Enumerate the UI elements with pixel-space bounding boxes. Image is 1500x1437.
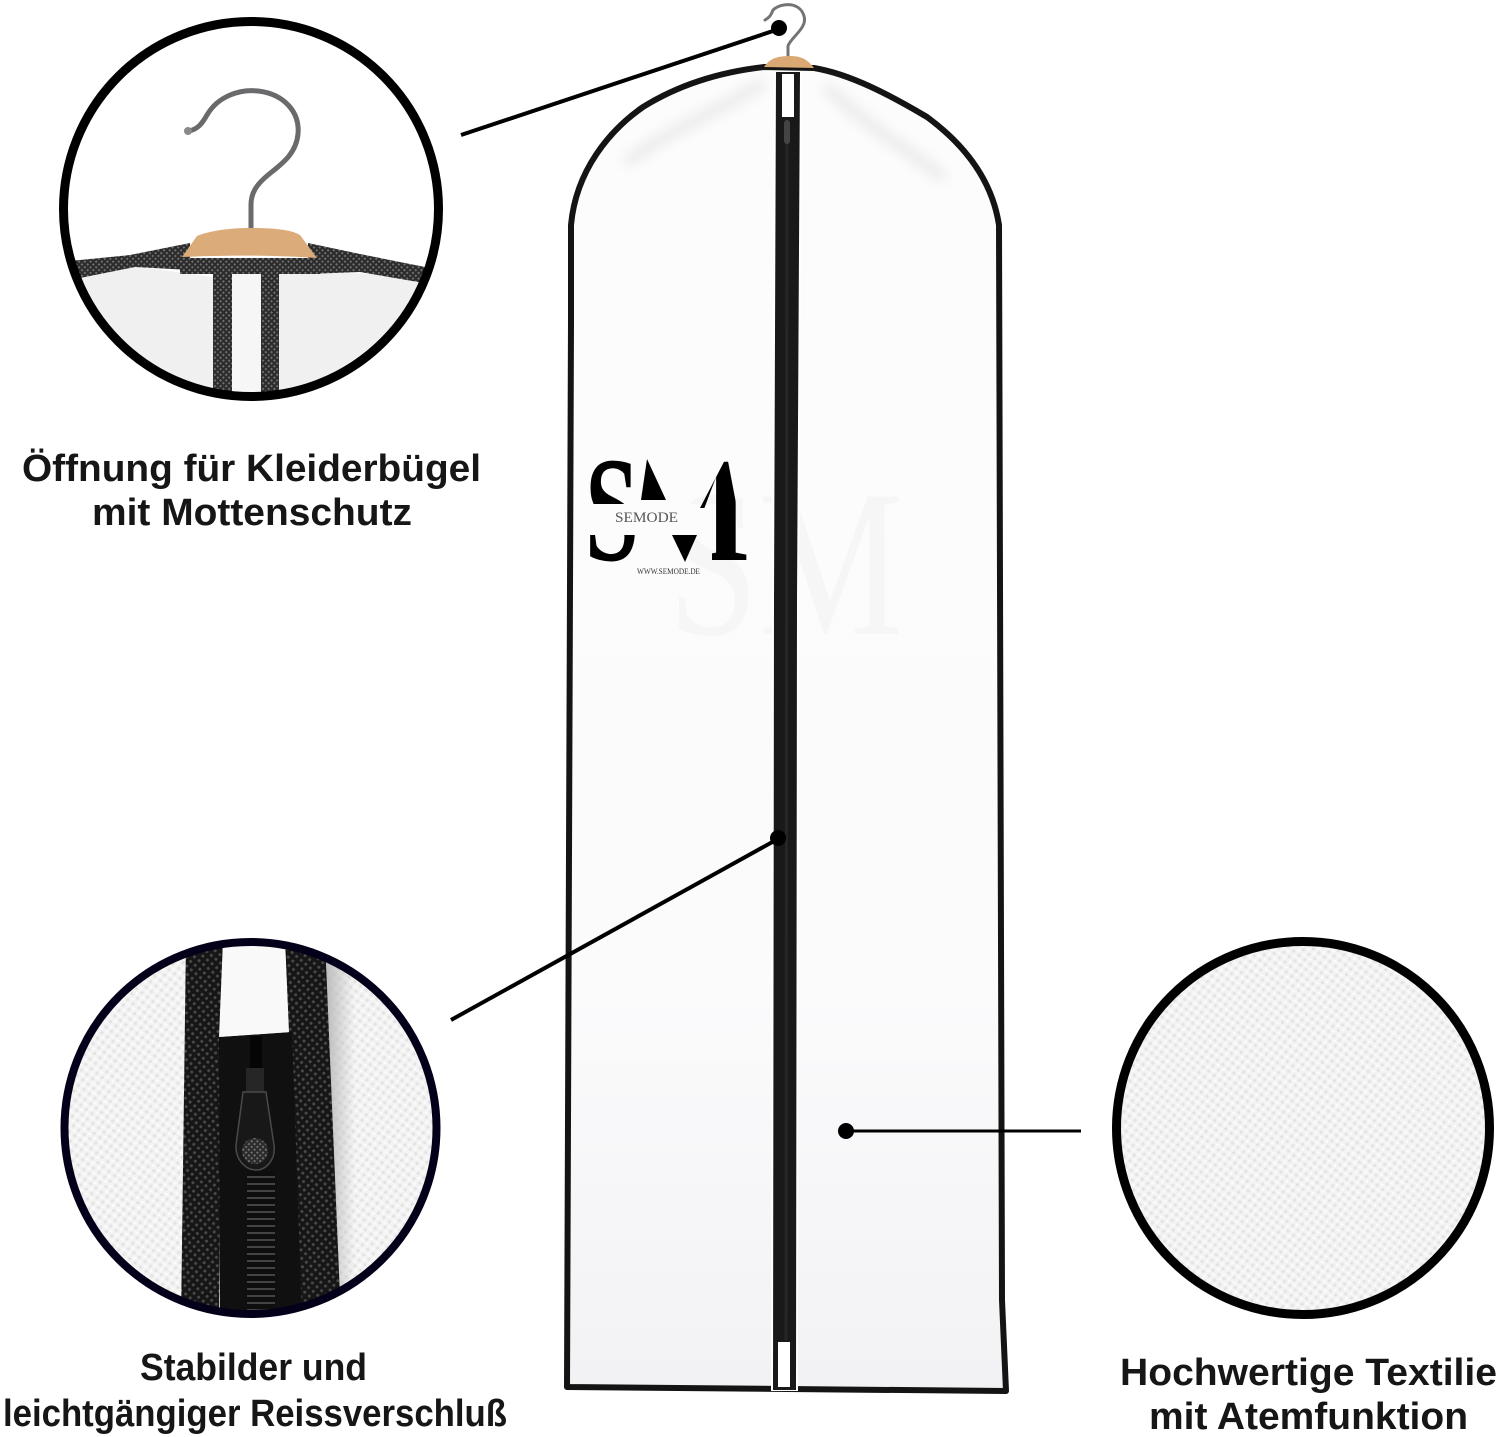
right strap <box>285 940 341 1320</box>
ring <box>64 942 436 1314</box>
teeth <box>247 1176 275 1310</box>
leader: textile <box>838 1123 1081 1139</box>
circle: zipper detail <box>60 938 442 1322</box>
caption: zipper: leichtgängiger Reissverschluß <box>3 1393 507 1435</box>
faint watermark logo: SM <box>668 448 903 680</box>
garment bag <box>567 67 1006 1391</box>
zipper pull <box>784 120 790 144</box>
circle: textile detail <box>1116 942 1490 1314</box>
pull tab <box>236 1092 274 1170</box>
leader: hanger <box>461 20 787 135</box>
fabric creases <box>630 85 940 175</box>
hanger on bag <box>764 5 814 68</box>
logo band <box>586 504 700 535</box>
caption: hanger: mit Mottenschutz <box>92 492 412 534</box>
leader: zipper <box>451 830 786 1020</box>
wooden shoulder <box>764 56 814 68</box>
caption: textile: Hochwertige Textilie <box>1120 1352 1497 1394</box>
logo wedge upper <box>641 459 666 500</box>
caption: zipper: Stabilder und <box>140 1347 367 1389</box>
logo letter S: S <box>585 427 639 593</box>
logo name: SEMODE <box>615 510 678 526</box>
slider <box>250 1036 262 1068</box>
ring <box>64 22 438 396</box>
logo wedge lower <box>672 535 697 562</box>
centre tape <box>219 1032 302 1320</box>
white tab <box>219 940 289 1037</box>
caption: textile: mit Atemfunktion <box>1149 1396 1468 1437</box>
logo <box>590 459 746 574</box>
top window <box>782 74 794 117</box>
caption: hanger <box>22 447 481 534</box>
bottom window <box>778 1342 790 1387</box>
circle: hanger detail <box>55 15 447 405</box>
caption: zipper <box>3 1347 507 1435</box>
piping <box>70 243 190 280</box>
bag body <box>567 67 1006 1391</box>
fabric panels <box>82 267 213 388</box>
wooden shoulder <box>182 228 317 258</box>
hook <box>765 5 805 56</box>
zipper <box>771 72 802 1391</box>
logo url: WWW.SEMODE.DE <box>637 567 700 576</box>
shading on right panel <box>326 962 352 1286</box>
logo letter M: M <box>630 427 750 593</box>
caption: hanger: Öffnung für Kleiderbügel <box>22 447 481 490</box>
caption: textile <box>1120 1352 1497 1437</box>
hook <box>188 91 298 228</box>
zipper straps <box>213 272 232 400</box>
left strap <box>181 940 223 1320</box>
